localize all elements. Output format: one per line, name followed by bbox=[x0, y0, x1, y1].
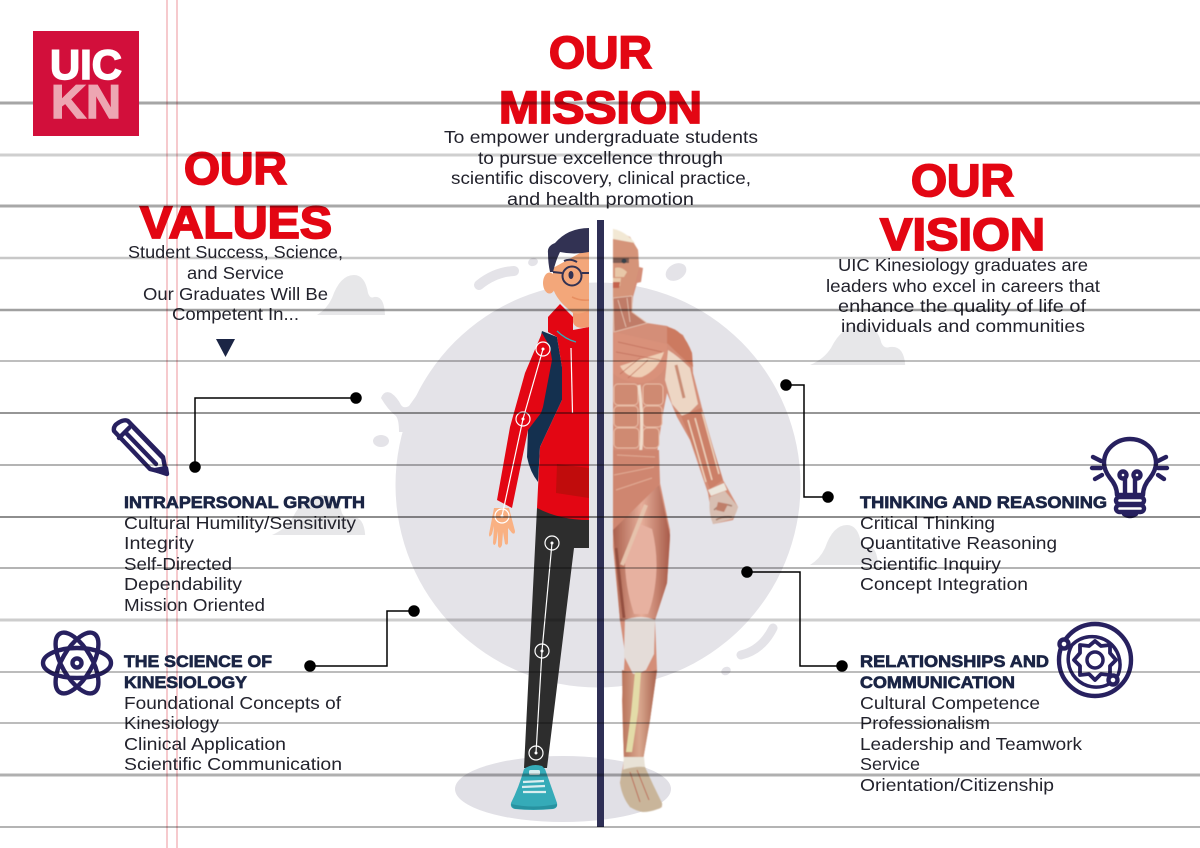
block: relationships and communication: RELATIONSHIPS AND bbox=[860, 652, 1049, 671]
muscle body outline bbox=[613, 229, 738, 812]
block: relationships and communication bbox=[860, 652, 1082, 795]
block: relationships and communication: Orientation/Citizenship bbox=[860, 775, 1054, 795]
block: science of kinesiology: THE SCIENCE OF bbox=[124, 652, 272, 671]
abdominal midline bbox=[613, 385, 642, 523]
student backpack bbox=[527, 331, 562, 482]
block: science of kinesiology: Kinesiology bbox=[124, 713, 219, 733]
block: relationships and communication: Service bbox=[860, 754, 920, 774]
block: science of kinesiology: Foundational Concepts of bbox=[124, 693, 341, 713]
values text: Our Graduates Will Be bbox=[143, 284, 328, 304]
shoe bbox=[511, 765, 557, 810]
block: thinking and reasoning bbox=[860, 493, 1107, 594]
block: intrapersonal growth: Dependability bbox=[124, 574, 242, 594]
student arm bbox=[497, 333, 552, 508]
vision text: UIC Kinesiology graduates are bbox=[838, 255, 1088, 275]
neck muscles bbox=[613, 296, 647, 332]
vision text: leaders who excel in careers that bbox=[826, 276, 1100, 296]
background circle and splashes bbox=[373, 257, 800, 688]
block: relationships and communication: COMMUNICATION bbox=[860, 673, 1015, 692]
vision text bbox=[826, 255, 1100, 336]
hoodie pocket bbox=[556, 464, 589, 498]
heading: our vision: OUR bbox=[911, 155, 1014, 206]
glasses bbox=[553, 260, 589, 286]
student trousers bbox=[524, 508, 589, 768]
logo: UIC KN bbox=[33, 31, 139, 136]
block: relationships and communication: Professionalism bbox=[860, 713, 990, 733]
connector: values bbox=[190, 393, 361, 472]
forearm muscles bbox=[681, 408, 723, 489]
mission text: To empower undergraduate students bbox=[444, 127, 758, 147]
block: thinking and reasoning: Critical Thinking bbox=[860, 513, 995, 533]
thigh bbox=[613, 485, 670, 621]
illustrated student half figure bbox=[489, 228, 589, 810]
mission text: scientific discovery, clinical practice, bbox=[451, 168, 751, 188]
heading: our vision: VISION bbox=[880, 209, 1045, 260]
connector: science bbox=[305, 606, 419, 671]
block: science of kinesiology bbox=[124, 652, 342, 774]
mission text: and health promotion bbox=[507, 189, 694, 209]
student hoodie torso bbox=[537, 304, 589, 520]
upper arm bbox=[665, 350, 698, 418]
student hand bbox=[489, 508, 515, 548]
heading: our values: VALUES bbox=[140, 197, 332, 248]
vision text: enhance the quality of life of bbox=[838, 296, 1086, 316]
connector: thinking bbox=[781, 380, 833, 502]
block: science of kinesiology: KINESIOLOGY bbox=[124, 673, 248, 692]
arm joints bbox=[495, 342, 550, 523]
face bbox=[553, 248, 589, 314]
heading: our values: OUR bbox=[184, 143, 287, 194]
down arrow bbox=[216, 339, 235, 357]
block: relationships and communication: Cultural Competence bbox=[860, 693, 1040, 713]
block: intrapersonal growth: Integrity bbox=[124, 533, 194, 553]
head detail bbox=[613, 229, 639, 300]
block: intrapersonal growth: Cultural Humility/Sensitivity bbox=[124, 513, 356, 533]
icon: atom bbox=[43, 626, 111, 700]
heading: our mission: MISSION bbox=[499, 82, 702, 133]
mission text bbox=[444, 127, 758, 209]
block: intrapersonal growth: INTRAPERSONAL GROWTH bbox=[124, 493, 365, 512]
central divider bar bbox=[597, 220, 604, 827]
block: intrapersonal growth: Mission Oriented bbox=[124, 595, 265, 615]
block: thinking and reasoning: THINKING AND REASONING bbox=[860, 493, 1107, 512]
pectoral muscle bbox=[613, 332, 667, 383]
ankle and foot bbox=[623, 757, 645, 770]
block: relationships and communication: Leadership and Teamwork bbox=[860, 734, 1082, 754]
heading: our values bbox=[140, 143, 332, 248]
icon: star orbit bbox=[1059, 624, 1131, 696]
anatomical muscle half figure bbox=[613, 229, 738, 812]
abdominal muscles bbox=[614, 384, 663, 448]
deltoid muscle bbox=[667, 327, 693, 367]
block: thinking and reasoning: Quantitative Reasoning bbox=[860, 533, 1057, 553]
block: science of kinesiology: Scientific Communication bbox=[124, 754, 342, 774]
mission text: to pursue excellence through bbox=[478, 148, 723, 168]
ear bbox=[543, 272, 556, 294]
block: intrapersonal growth: Self-Directed bbox=[124, 554, 232, 574]
block: science of kinesiology: Clinical Application bbox=[124, 734, 286, 754]
values text: and Service bbox=[187, 263, 284, 283]
shin bbox=[622, 670, 657, 760]
background clouds bbox=[272, 275, 905, 565]
logo: UIC KN: KN bbox=[51, 75, 121, 128]
heading: our vision bbox=[880, 155, 1045, 260]
logo: UIC KN: UIC bbox=[50, 41, 122, 88]
block: thinking and reasoning: Scientific Inquiry bbox=[860, 554, 1001, 574]
connector: relationships bbox=[742, 567, 847, 671]
neck bbox=[573, 310, 589, 328]
hair bbox=[548, 228, 589, 272]
values text: Competent In... bbox=[172, 304, 299, 324]
icon: light bulb bbox=[1092, 439, 1167, 516]
wrist and hand bbox=[708, 483, 738, 524]
block: intrapersonal growth bbox=[124, 493, 365, 615]
block: thinking and reasoning: Concept Integration bbox=[860, 574, 1028, 594]
values text: Student Success, Science, bbox=[128, 242, 343, 262]
heading: our mission: OUR bbox=[549, 27, 652, 78]
leg joints bbox=[529, 536, 559, 760]
lower torso bbox=[613, 450, 660, 535]
floor shadow ellipse bbox=[455, 756, 671, 822]
red margin lines bbox=[167, 0, 177, 848]
values text bbox=[128, 242, 343, 324]
heading: our mission bbox=[499, 27, 702, 133]
vision text: individuals and communities bbox=[841, 316, 1085, 336]
knee bbox=[624, 617, 655, 676]
icon: pencil bbox=[114, 420, 167, 474]
